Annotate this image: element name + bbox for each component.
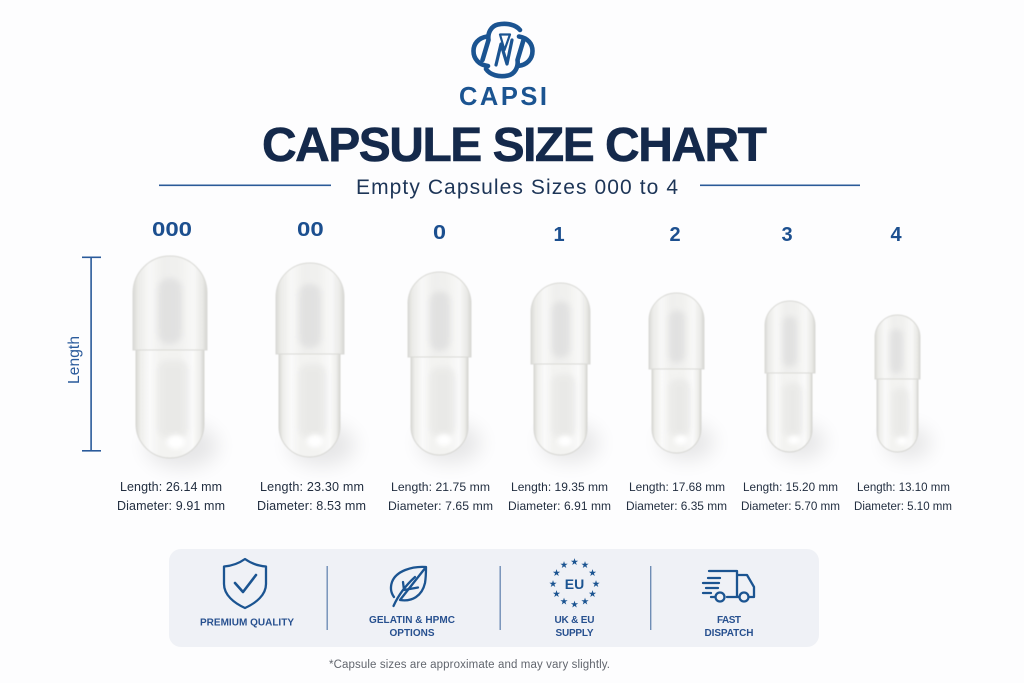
capsule 4 <box>875 315 931 459</box>
size label 2: 2 <box>669 224 681 246</box>
dimensions 1 <box>508 480 611 513</box>
feature: UK and EU supply: SUPPLY <box>556 628 594 639</box>
feature: fast dispatch: FAST <box>717 615 741 626</box>
size label 4: 4 <box>890 224 902 246</box>
title: CAPSULE SIZE CHART <box>262 119 767 172</box>
feature: gelatin and HPMC <box>369 567 455 639</box>
feature: gelatin and HPMC: OPTIONS <box>390 628 435 639</box>
dimensions 0 <box>388 480 493 513</box>
dimensions 2: Length: 17.68 mm <box>629 480 725 494</box>
dimensions 00 <box>257 480 366 513</box>
feature: UK and EU supply: UK & EU <box>554 615 594 626</box>
icon: leaf <box>391 567 426 606</box>
capsule column: 3 <box>741 224 840 513</box>
dimensions 2: Diameter: 6.35 mm <box>626 499 727 513</box>
capsule 2 <box>649 293 714 460</box>
dimensions 4: Diameter: 5.10 mm <box>854 501 952 513</box>
icon: truck <box>703 571 754 602</box>
capsule column: 1 <box>508 224 611 513</box>
capsule 00 <box>276 263 355 466</box>
capsule 1 <box>531 283 599 462</box>
logo: Capsi <box>459 24 547 111</box>
dimensions 4: Length: 13.10 mm <box>857 482 950 494</box>
capsule 000 <box>133 256 218 468</box>
footnote: *Capsule sizes are approximate and may vary slightly. <box>329 659 610 671</box>
capsule column: 00 <box>257 218 366 513</box>
capsule column: 4 <box>854 224 952 513</box>
capsule column: 000 <box>117 218 225 513</box>
dimensions 3: Length: 15.20 mm <box>743 481 838 494</box>
icon: EU stars: ★★★★★★★★★★★★ <box>549 557 600 610</box>
feature: fast dispatch <box>703 571 754 639</box>
capsule 3 <box>765 301 825 459</box>
icon: shield <box>224 559 266 608</box>
dimensions 4 <box>854 482 952 513</box>
dimensions 3 <box>741 481 840 513</box>
feature: fast dispatch: DISPATCH <box>704 628 754 639</box>
feature: premium quality <box>200 559 294 628</box>
dimensions 000: Length: 26.14 mm <box>120 480 222 494</box>
dimensions 000: Diameter: 9.91 mm <box>117 499 225 513</box>
dimensions 0: Length: 21.75 mm <box>391 480 490 494</box>
capsule column: 0 <box>388 221 493 513</box>
logo mark <box>474 24 532 76</box>
dimensions 3: Diameter: 5.70 mm <box>741 500 840 513</box>
dimensions 1: Diameter: 6.91 mm <box>508 499 611 513</box>
icon: EU stars: EU <box>565 576 584 592</box>
dimensions 2 <box>626 480 727 513</box>
length scale: Length <box>66 336 83 384</box>
capsule column: 2 <box>626 224 727 513</box>
size label 000: 000 <box>152 218 192 241</box>
dimensions 1: Length: 19.35 mm <box>511 480 608 494</box>
feature: gelatin and HPMC: GELATIN & HPMC <box>369 615 455 626</box>
capsule 0 <box>408 272 481 463</box>
dimensions 00: Diameter: 8.53 mm <box>257 499 366 513</box>
feature: premium quality: PREMIUM QUALITY <box>200 618 294 628</box>
dimensions 0: Diameter: 7.65 mm <box>388 499 493 513</box>
dimensions 00: Length: 23.30 mm <box>260 480 364 494</box>
size label 00: 00 <box>297 218 324 241</box>
panel: features <box>169 549 819 647</box>
size label 0: 0 <box>433 221 446 244</box>
panel background <box>169 549 819 647</box>
size label 3: 3 <box>781 224 793 246</box>
subtitle with rules: Empty Capsules Sizes 000 to 4 <box>356 176 678 199</box>
feature: UK and EU supply <box>549 557 600 639</box>
dimensions 000 <box>117 480 225 513</box>
size label 1: 1 <box>553 224 565 246</box>
logo wordmark: CAPSI <box>459 83 547 111</box>
